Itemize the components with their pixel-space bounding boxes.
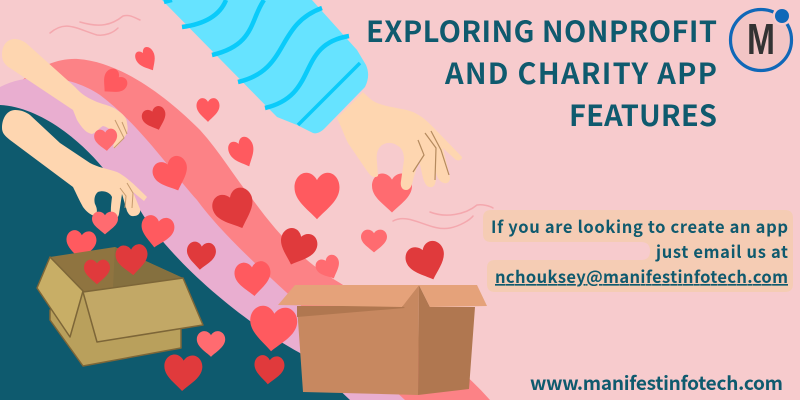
website: www.manifestinfotech.com <box>530 369 783 396</box>
right face <box>418 285 475 395</box>
box front flap <box>83 278 203 342</box>
heart <box>402 238 452 286</box>
callout text: If you are looking to create an app <box>491 214 788 238</box>
heart <box>248 305 298 353</box>
heart held by right hand <box>372 174 412 212</box>
flap shadow <box>297 306 405 317</box>
callout background <box>483 210 793 292</box>
heart <box>133 45 161 75</box>
small open cardboard box <box>37 243 203 366</box>
heart <box>225 134 261 172</box>
heart <box>150 153 194 197</box>
heart <box>197 331 225 357</box>
callout <box>483 210 793 292</box>
sleeve stripes <box>164 0 360 125</box>
callout: nchouksey@manifestinfotech.com <box>495 264 788 288</box>
hearts scattered behind the boxes <box>65 45 452 392</box>
heart <box>163 354 203 392</box>
heart <box>274 225 320 271</box>
heart <box>294 173 340 219</box>
logo dot <box>775 9 789 23</box>
heart <box>234 260 272 298</box>
title <box>366 9 717 135</box>
finger creases <box>413 131 449 180</box>
heart <box>361 230 387 252</box>
heart <box>209 184 261 236</box>
decorative squiggle near callout <box>393 205 493 229</box>
heart in lower hand <box>92 212 118 234</box>
front face <box>297 285 419 395</box>
heart in box <box>115 243 149 277</box>
heart <box>253 354 285 386</box>
heart <box>96 66 130 100</box>
heart in upper hand <box>94 128 118 152</box>
box left flap <box>37 257 83 337</box>
heart in box <box>84 260 110 284</box>
title: FEATURES <box>569 93 717 135</box>
finger creases <box>114 120 127 148</box>
heart <box>65 229 97 261</box>
title: EXPLORING NONPROFIT <box>366 9 717 51</box>
heart <box>196 98 220 122</box>
logo ring <box>730 10 792 70</box>
callout: just email us at <box>655 239 788 263</box>
finger creases <box>120 183 133 208</box>
sleeve <box>162 0 368 133</box>
teal wave band <box>0 105 350 400</box>
heart <box>140 104 170 134</box>
logo ring gap <box>772 6 792 26</box>
arm: right hand <box>337 92 462 190</box>
box body <box>50 293 181 366</box>
red wave band <box>20 59 490 400</box>
heart <box>313 253 345 283</box>
logo letter: M <box>747 15 775 64</box>
left top flap <box>278 285 419 307</box>
logo <box>730 6 792 70</box>
heart <box>138 214 176 250</box>
arm: upper left <box>2 39 128 152</box>
title: AND CHARITY APP <box>444 51 717 93</box>
right top flap <box>419 285 487 307</box>
box interior <box>50 247 183 292</box>
large cardboard box <box>278 285 487 395</box>
arm: lower left <box>2 110 147 234</box>
decorative squiggle top left <box>50 15 140 35</box>
heart <box>185 241 217 271</box>
purple wave band <box>0 78 405 400</box>
